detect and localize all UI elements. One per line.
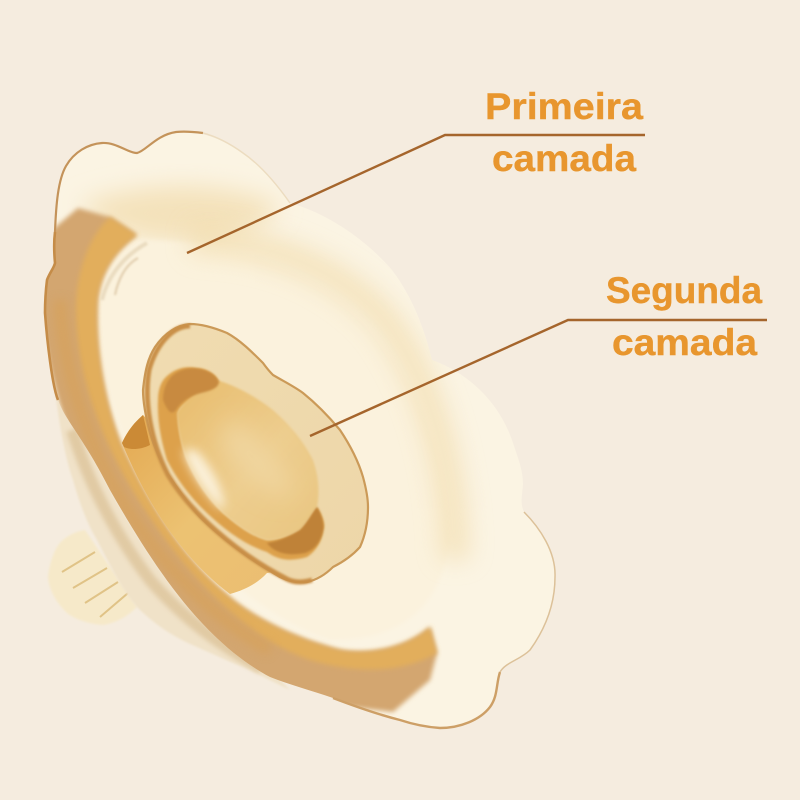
second layer: inner flange and nipple tube [122,324,368,594]
label: primeira camada: camada [492,138,636,179]
darker left rim of the disc [147,326,312,582]
rim band outer shade [39,208,437,712]
dark crescent bottom [267,507,324,554]
warm shade band on the right [190,240,455,560]
first layer: outer flange [39,132,555,728]
leader line: primeira camada [187,135,645,253]
flange outline [55,132,203,232]
inner pale surface [151,242,178,246]
label: primeira camada: Primeira [485,86,643,127]
label: primeira camada [485,86,643,179]
inner flange disc [143,324,368,582]
lip highlights at the inner rim edge [102,243,147,300]
infographic: silicone nipple shield with two labelled layers [44,92,767,730]
label: segunda camada [606,270,762,363]
label: segunda camada: camada [612,322,757,363]
nipple opening [177,380,318,540]
tube body [122,415,290,594]
white highlight inside the opening [183,450,223,510]
dark crescent top [163,368,219,413]
outer cone behind the rim [55,390,290,690]
label: segunda camada: Segunda [606,270,762,311]
stem stub behind the shield [48,530,137,625]
rim band inner amber strip [76,217,437,670]
soft shade across upper flange [80,186,280,242]
leader line: segunda camada [310,320,767,436]
orange ring around the opening [158,367,324,560]
icon: nipple shield [39,132,555,728]
